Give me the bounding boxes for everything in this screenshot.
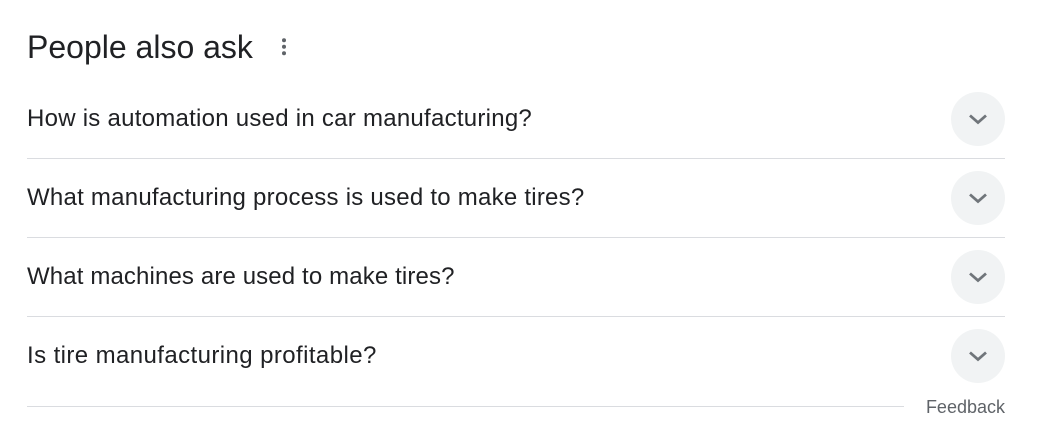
expand button 2: [951, 171, 1005, 225]
question 1: How is automation used in car manufacturing?: [27, 105, 532, 132]
question 4: Is tire manufacturing profitable?: [27, 342, 377, 369]
question 3: What machines are used to make tires?: [27, 263, 455, 290]
expand button 4: [951, 329, 1005, 383]
expand button 1: [951, 92, 1005, 146]
question 2: What manufacturing process is used to make tires?: [27, 184, 584, 211]
heading: People also ask: [27, 29, 253, 65]
icon: more options: [282, 38, 286, 56]
expand button 3: [951, 250, 1005, 304]
feedback link: Feedback: [926, 397, 1005, 417]
